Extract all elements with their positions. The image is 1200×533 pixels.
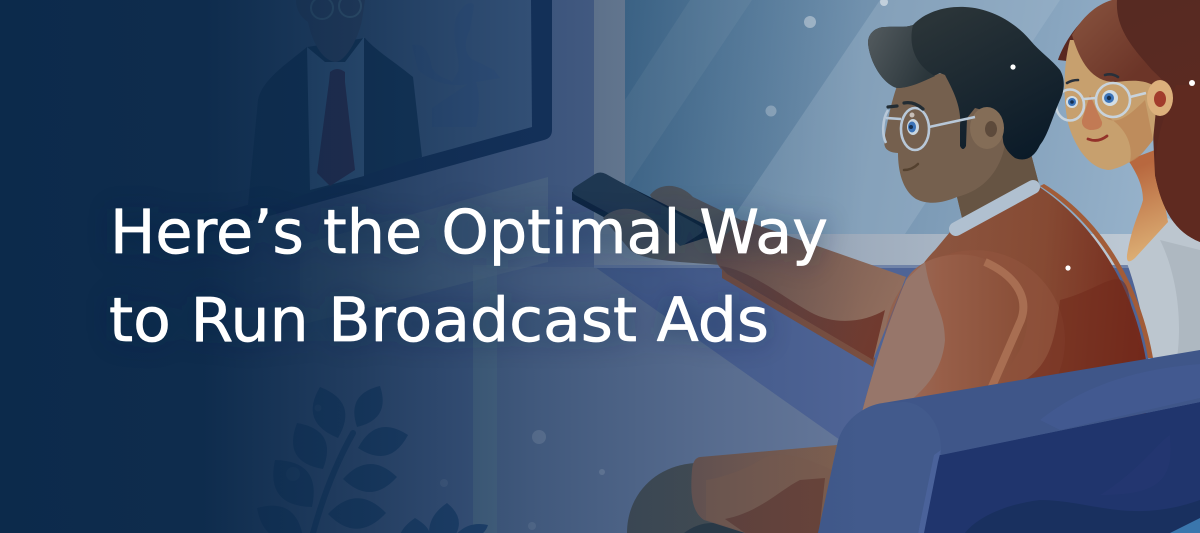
- man hair: [868, 7, 1064, 159]
- woman ear: [1147, 80, 1173, 116]
- man forearm: [716, 220, 906, 367]
- woman top: [1127, 218, 1200, 380]
- chair arm: [818, 402, 941, 533]
- anchor shirt: [307, 37, 364, 190]
- man glasses: [883, 108, 975, 150]
- chair front: [915, 402, 1200, 533]
- television: [200, 0, 552, 235]
- woman eyebrows: [1067, 74, 1118, 83]
- news anchor: [247, 0, 422, 215]
- woman front hair: [1072, 0, 1200, 95]
- man ear: [970, 107, 1004, 149]
- plant leaves: [257, 386, 488, 533]
- man palm: [603, 209, 725, 265]
- man neck and face: [884, 70, 1040, 222]
- man sleeve: [857, 254, 1027, 432]
- title shadow: Here’s the Optimal Way: [110, 197, 828, 268]
- sleeve highlight: [985, 262, 1023, 398]
- title shadow: to Run Broadcast Ads: [109, 285, 769, 356]
- anchor glasses: [311, 0, 361, 19]
- man shoe: [627, 463, 720, 533]
- tv frame: [200, 0, 552, 235]
- window: [594, 0, 1200, 268]
- plant stem: [313, 433, 353, 533]
- woman right-side hair: [1155, 85, 1200, 242]
- woman face: [1064, 40, 1160, 170]
- man eyebrows: [888, 103, 923, 109]
- title shadow: [109, 197, 828, 356]
- woman neck: [1127, 150, 1168, 261]
- title: Here’s the Optimal Way: [110, 197, 828, 268]
- dust particles: [286, 0, 1195, 530]
- man leg: [691, 445, 837, 533]
- armchair: [818, 350, 1200, 533]
- anchor suit: [247, 38, 422, 215]
- title: [109, 197, 828, 356]
- map on screen: [412, 3, 500, 127]
- title: to Run Broadcast Ads: [109, 285, 769, 356]
- man eye: [907, 119, 919, 135]
- man: [572, 7, 1153, 533]
- man collar: [956, 187, 1033, 229]
- woman eyes: [1066, 90, 1118, 108]
- man back fingers: [650, 186, 745, 262]
- tv screen: [200, 0, 532, 218]
- man sweater body: [860, 186, 1146, 420]
- window light on the back wall: [300, 177, 548, 533]
- woman glasses: [1056, 83, 1146, 120]
- anchor head: [296, 0, 365, 62]
- man mouth: [904, 164, 918, 170]
- remote control: [572, 172, 712, 257]
- plant: [257, 386, 488, 533]
- woman mouth: [1088, 136, 1107, 140]
- anchor tie: [317, 69, 355, 186]
- woman back hair: [1058, 0, 1200, 242]
- chair back: [883, 350, 1200, 455]
- woman: [1056, 0, 1200, 380]
- woman nose: [1082, 95, 1102, 130]
